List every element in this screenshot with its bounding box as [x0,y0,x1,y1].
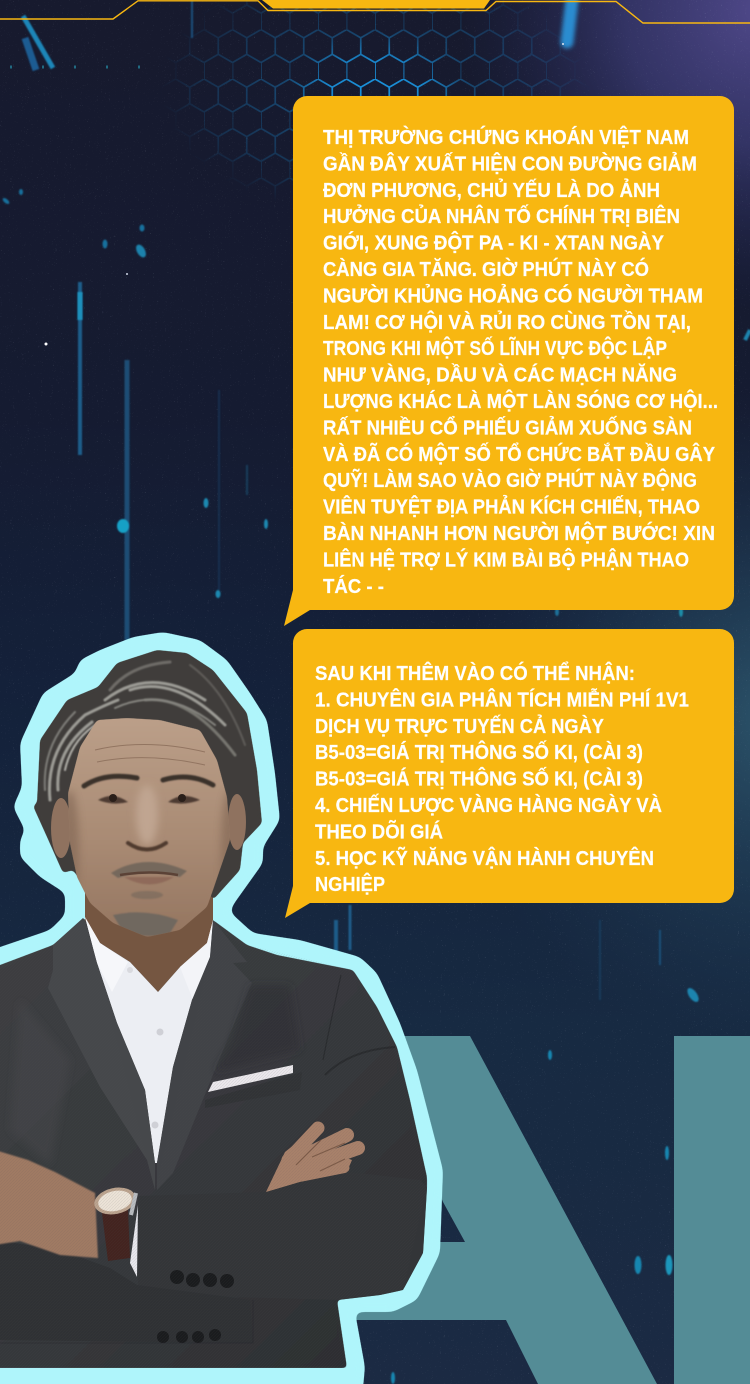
bubble text: market commentary: LƯỢNG KHÁC LÀ MỘT LÀN SÓNG CƠ HỘI... [323,389,718,413]
cyan cut-out outline [0,632,443,1384]
neck [85,890,213,992]
left lapel [48,918,155,1190]
bubble text: market commentary: GIỚI, XUNG ĐỘT PA - KI - XTAN NGÀY [323,231,664,255]
large background letters AI [340,1036,750,1384]
bubble text: market commentary: BÀN NHANH HƠN NGƯỜI MỘT BƯỚC! XIN [323,521,715,545]
bubble text: market commentary: TRONG KHI MỘT SỐ LĨNH VỰC ĐỘC LẬP [323,336,667,360]
bubble text: market commentary: CÀNG GIA TĂNG. GIỜ PHÚT NÀY CÓ [323,257,649,281]
bubble text: benefits list: NGHIỆP [315,872,385,896]
watch [92,1184,138,1261]
bubble text: benefits list: 4. CHIẾN LƯỢC VÀNG HÀNG NGÀY VÀ [315,794,662,817]
bubble text: benefits list: DỊCH VỤ TRỰC TUYẾN CẢ NGÀY [315,715,604,738]
facial features [61,744,237,936]
bubble text: market commentary: NHƯ VÀNG, DẦU VÀ CÁC MẠCH NĂNG [323,364,677,387]
speech bubble: benefits list [285,629,734,918]
hair [33,650,262,900]
face [68,718,230,937]
top frame ornament [0,0,750,23]
bubble text: market commentary: ĐƠN PHƯƠNG, CHỦ YẾU LÀ DO ẢNH [323,178,660,202]
jacket seam lines [0,975,395,1343]
bubble text: benefits list: SAU KHI THÊM VÀO CÓ THỂ NHẬN: [315,661,635,685]
pocket [205,1072,302,1108]
left hand [0,1150,98,1258]
ears [51,794,246,858]
bottom edge band [0,1368,350,1384]
bubble text: market commentary: VÀ ĐÃ CÓ MỘT SỐ TỔ CHỨC BẮT ĐẦU GÂY [323,442,715,466]
bubble text: market commentary: THỊ TRƯỜNG CHỨNG KHOÁN VIỆT NAM [323,125,689,149]
bubble text: market commentary: TÁC - - [323,575,384,598]
portrait: man in suit with cyan outline [0,632,443,1384]
bubble text: market commentary: NGƯỜI KHỦNG HOẢNG CÓ NGƯỜI THAM [323,283,703,307]
speech bubble: market commentary [284,96,734,626]
bubble text: benefits list: 5. HỌC KỸ NĂNG VẬN HÀNH CHUYÊN [315,846,654,870]
lower left arm sleeve [0,1240,253,1343]
jacket fabric texture [0,920,427,1368]
jacket [0,915,427,1368]
shirt cuff [130,1205,138,1277]
bubble text: market commentary: RẤT NHIỀU CỔ PHIẾU GIẢM XUỐNG SÀN [323,415,692,439]
bubble text: benefits list: 1. CHUYÊN GIA PHÂN TÍCH MIỄN PHÍ 1V1 [315,687,689,711]
bubble text: market commentary: HƯỞNG CỦA NHÂN TỐ CHÍNH TRỊ BIÊN [323,204,680,228]
right hand fingers [266,1128,358,1192]
bubble text: market commentary: VIÊN TUYỆT ĐỊA PHẢN KÍCH CHIẾN, THAO [323,495,700,519]
bubble text: benefits list: B5-03=GIÁ TRỊ THÔNG SỐ KI, (CÀI 3) [315,767,643,791]
jacket shadows [10,985,300,1165]
bubble text: benefits list: B5-03=GIÁ TRỊ THÔNG SỐ KI, (CÀI 3) [315,740,643,764]
shirt [85,917,213,1163]
pocket square [208,1065,293,1092]
bubble text: market commentary: QUỸ! LÀM SAO VÀO GIỜ PHÚT NÀY ĐỘNG [323,468,697,492]
grey hair streaks [45,662,245,800]
bubble text: benefits list: THEO DÕI GIÁ [315,819,443,843]
right arm sleeve [138,1172,427,1300]
collar and placket shading [85,917,213,1128]
bubble text: market commentary: LAM! CƠ HỘI VÀ RỦI RO CÙNG TỒN TẠI, [323,310,691,334]
bubble text: market commentary [323,125,718,598]
bubble text: market commentary: GẦN ĐÂY XUẤT HIỆN CON ĐƯỜNG GIẢM [323,151,697,175]
bubble text: market commentary: LIÊN HỆ TRỢ LÝ KIM BÀI BỘ PHẬN THAO [323,547,689,571]
bubble text: benefits list [315,661,689,896]
sleeve buttons [157,1270,234,1343]
hexagon grid [173,0,575,194]
right lapel [157,920,252,1190]
